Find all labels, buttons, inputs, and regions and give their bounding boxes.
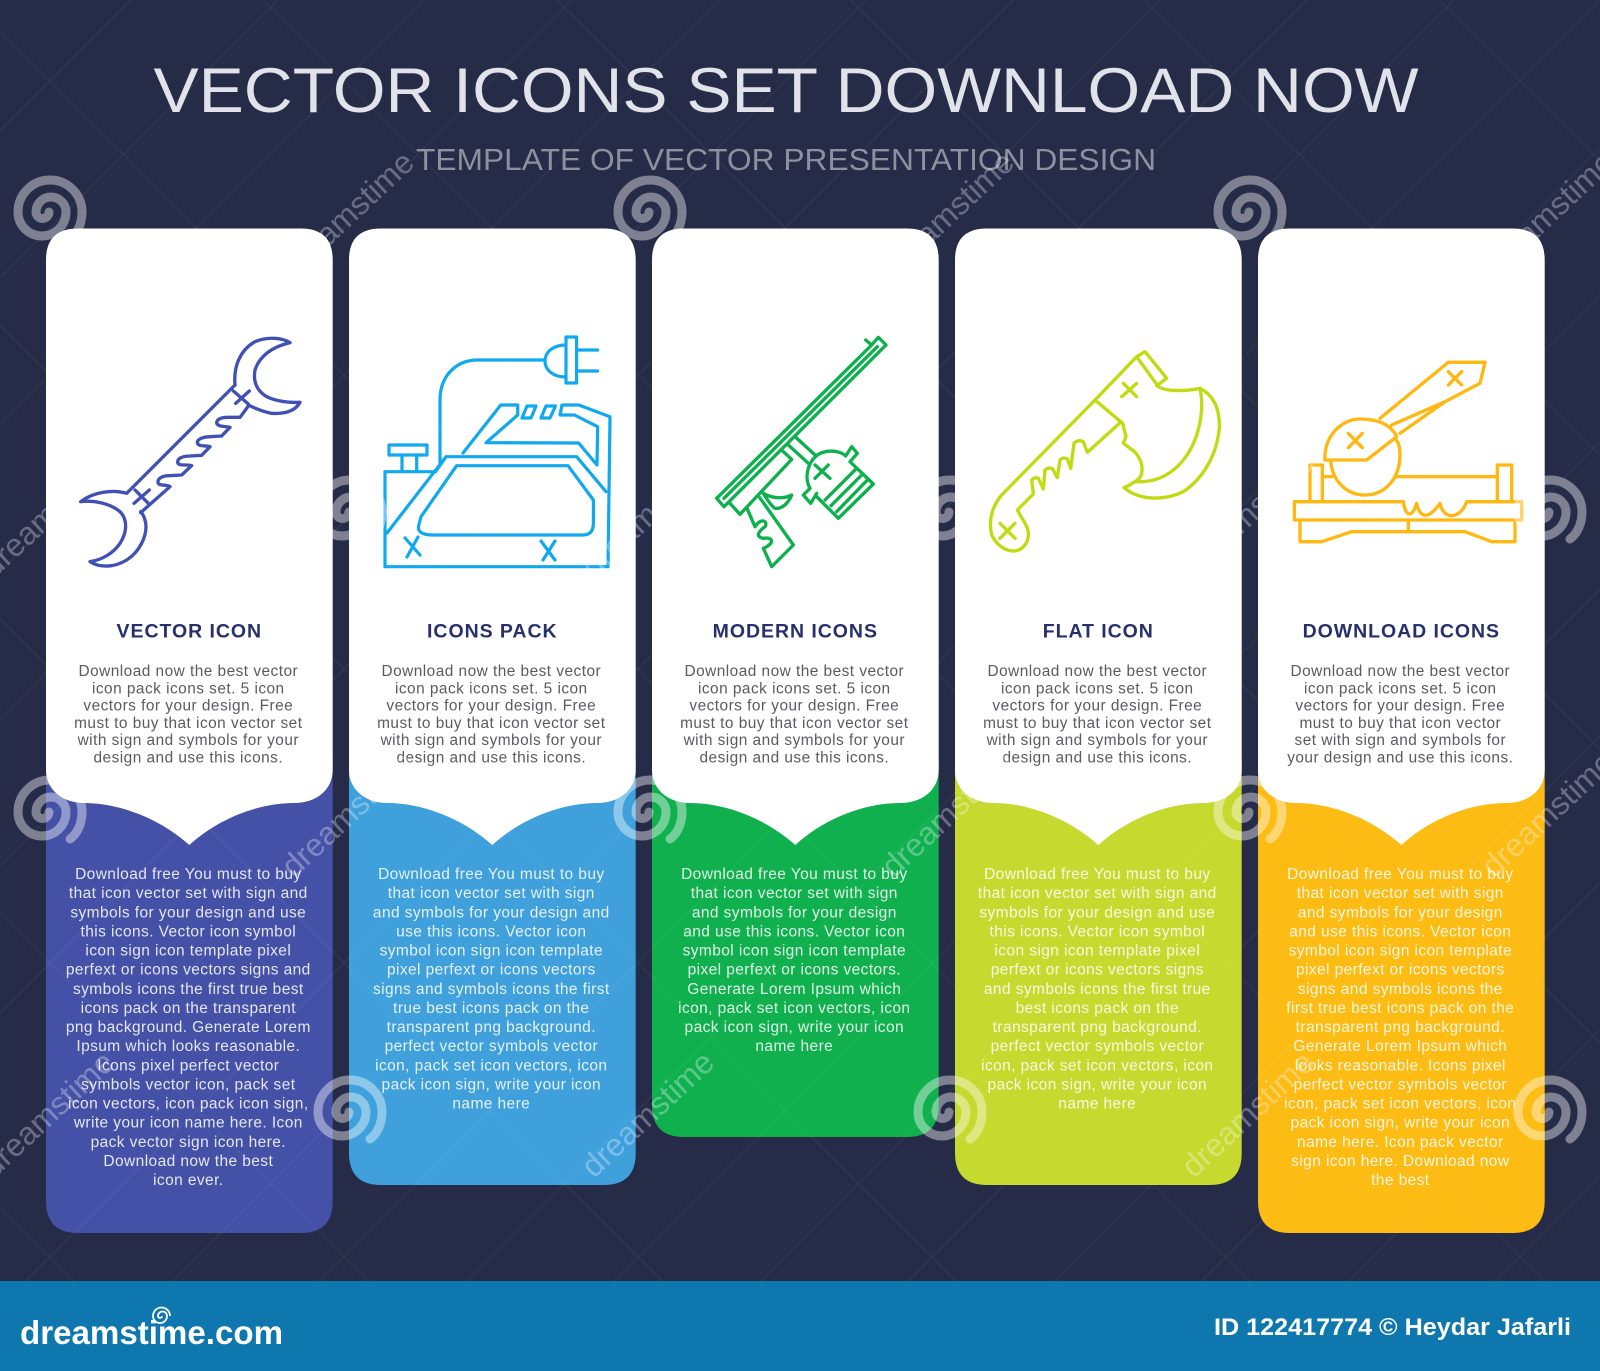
description: design and use this icons. <box>397 750 586 766</box>
lower text: Download free You must to buy <box>984 866 1211 883</box>
lower text: icon, pack set icon vectors, icon <box>375 1057 607 1074</box>
lower text: Icons pixel perfect vector <box>97 1057 279 1074</box>
icon: wrench <box>81 338 300 566</box>
lower text: name here. Icon pack vector <box>1297 1134 1504 1151</box>
lower text: icon, pack set icon vectors, icon <box>981 1057 1213 1074</box>
lower text: and use this icons. Vector icon <box>1289 923 1511 940</box>
heading: ICONS PACK <box>427 620 558 642</box>
colored lower block <box>46 760 333 1233</box>
lower text: icon sign icon template pixel <box>85 943 291 960</box>
description: vectors for your design. Free <box>992 698 1202 715</box>
watermark overlay: dreamstime <box>1174 1044 1321 1184</box>
footer logo: dreamstime.com <box>20 1314 283 1351</box>
lower text: icon sign icon template pixel <box>994 943 1200 960</box>
lower text: Download free You must to buy <box>681 866 908 883</box>
lower text: this icons. Vector icon symbol <box>989 923 1205 940</box>
lower text: Download free You must to buy <box>378 866 605 883</box>
lower text: symbol icon sign icon template <box>683 943 906 960</box>
description: Download now the best vector <box>987 663 1207 680</box>
lower text: transparent png background. <box>993 1019 1202 1036</box>
lower text: perfect vector symbols vector <box>1294 1076 1507 1093</box>
lower text: perfext or icons vectors signs and <box>66 962 311 979</box>
white upper block <box>349 228 636 845</box>
description: icon pack icons set. 5 icon <box>1001 680 1194 697</box>
description: with sign and symbols for your <box>77 732 299 749</box>
lower text: symbols for your design and use <box>70 904 306 921</box>
colored lower block <box>955 760 1242 1185</box>
lower text: perfect vector symbols vector <box>385 1038 598 1055</box>
description: your design and use this icons. <box>1287 750 1513 766</box>
heading: VECTOR ICON <box>117 620 262 642</box>
icon: paintball gun <box>717 337 886 567</box>
lower text: pack icon sign, write your icon <box>382 1076 601 1093</box>
description: design and use this icons. <box>700 750 889 766</box>
lower text: transparent png background. <box>387 1019 596 1036</box>
lower text: and use this icons. Vector icon <box>683 923 905 940</box>
footer bar <box>0 1281 1600 1371</box>
description: with sign and symbols for your <box>683 732 905 749</box>
lower text: symbols for your design and use <box>979 904 1215 921</box>
lower text: Download now the best <box>103 1153 273 1170</box>
white upper block <box>46 228 333 845</box>
colored lower block <box>349 760 636 1185</box>
icon: mitre saw <box>1294 362 1522 542</box>
description: vectors for your design. Free <box>689 698 899 715</box>
footer background <box>0 1281 1600 1371</box>
lower text: that icon vector set with sign <box>691 885 898 902</box>
lower text: icon, pack set icon vectors, icon <box>1284 1096 1516 1113</box>
lower text: pixel perfext or icons vectors <box>1296 962 1505 979</box>
watermark overlay: dreamstime <box>874 744 1021 884</box>
lower text: that icon vector set with sign and <box>978 885 1217 902</box>
lower text: Generate Lorem Ipsum which <box>687 981 901 998</box>
description: must to buy that icon vector set <box>680 715 909 732</box>
lower text: and symbols for your design and <box>373 904 610 921</box>
watermark overlay: dreamstime <box>874 144 1021 284</box>
colored lower block <box>652 760 939 1137</box>
lower text: name here <box>755 1038 833 1055</box>
lower text: symbols vector icon, pack set <box>81 1076 296 1093</box>
lower text: icon, pack set icon vectors, icon <box>678 1000 910 1017</box>
lower text: signs and symbols icons the <box>1298 981 1503 998</box>
lower text: Generate Lorem Ipsum which <box>1293 1038 1507 1055</box>
panel: download icons <box>1258 228 1545 1233</box>
description: must to buy that icon vector set <box>74 715 303 732</box>
description: Download now the best vector <box>78 663 298 680</box>
white upper block <box>955 228 1242 845</box>
description: design and use this icons. <box>1003 750 1192 766</box>
lower text: symbol icon sign icon template <box>1289 943 1512 960</box>
icon: electric planer <box>385 337 610 567</box>
watermark overlay: dreamstime <box>574 444 721 584</box>
description: icon pack icons set. 5 icon <box>1304 680 1497 697</box>
lower text: true best icons pack on the <box>393 1000 589 1017</box>
description: icon pack icons set. 5 icon <box>395 680 588 697</box>
lower text: pixel perfext or icons vectors. <box>688 962 901 979</box>
lower text: symbols icons the first true best <box>73 981 304 998</box>
description: Download now the best vector <box>381 663 601 680</box>
description: must to buy that icon vector <box>1299 715 1501 732</box>
heading: FLAT ICON <box>1043 620 1154 642</box>
lower text: that icon vector set with sign <box>1297 885 1504 902</box>
panel: flat icon <box>955 228 1242 1185</box>
lower text: and symbols for your design <box>692 904 897 921</box>
description: vectors for your design. Free <box>386 698 596 715</box>
lower text: perfect vector symbols vector <box>991 1038 1204 1055</box>
lower text: signs and symbols icons the first <box>373 981 610 998</box>
lower text: first true best icons pack on the <box>1286 1000 1514 1017</box>
lower text: symbol icon sign icon template <box>380 943 603 960</box>
white upper block <box>1258 228 1545 845</box>
lower text: write your icon name here. Icon <box>73 1115 303 1132</box>
title: VECTOR ICONS SET DOWNLOAD NOW <box>154 56 1419 126</box>
lower text: name here <box>1058 1096 1136 1113</box>
footer image id and credit: ID 122417774 © Heydar Jafarli <box>1214 1314 1571 1341</box>
description: Download now the best vector <box>684 663 904 680</box>
description: must to buy that icon vector set <box>983 715 1212 732</box>
watermark overlay: dreamstime <box>274 744 421 884</box>
subtitle: TEMPLATE OF VECTOR PRESENTATION DESIGN <box>416 142 1156 177</box>
lower text: pixel perfext or icons vectors <box>387 962 596 979</box>
heading: DOWNLOAD ICONS <box>1303 620 1500 642</box>
description: design and use this icons. <box>94 750 283 766</box>
icon: axe <box>990 352 1219 551</box>
lower text: icons pack on the transparent <box>81 1000 296 1017</box>
lower text: that icon vector set with sign and <box>69 885 308 902</box>
description: icon pack icons set. 5 icon <box>92 680 285 697</box>
lower text: and symbols for your design <box>1298 904 1503 921</box>
description: must to buy that icon vector set <box>377 715 606 732</box>
panel: modern icons <box>652 228 939 1137</box>
lower text: Ipsum which looks reasonable. <box>76 1038 300 1055</box>
lower text: that icon vector set with sign <box>388 885 595 902</box>
description: with sign and symbols for your <box>986 732 1208 749</box>
watermark overlay: dreamstime <box>1174 444 1321 584</box>
lower text: png background. Generate Lorem <box>66 1019 311 1036</box>
lower text: transparent png background. <box>1296 1019 1505 1036</box>
panel: icons pack <box>349 228 636 1185</box>
lower text: icon vectors, icon pack icon sign, <box>68 1096 309 1113</box>
lower text: the best <box>1371 1172 1430 1189</box>
lower text: name here <box>452 1096 530 1113</box>
description: icon pack icons set. 5 icon <box>698 680 891 697</box>
lower text: best icons pack on the <box>1016 1000 1179 1017</box>
panel: vector icon <box>46 228 333 1233</box>
watermark overlay: dreamstime <box>574 1044 721 1184</box>
description: vectors for your design. Free <box>1295 698 1505 715</box>
lower text: use this icons. Vector icon <box>396 923 586 940</box>
white upper block <box>652 228 939 845</box>
lower text: pack icon sign, write your icon <box>1291 1115 1510 1132</box>
lower text: and symbols icons the first true <box>984 981 1211 998</box>
lower text: looks reasonable. Icons pixel <box>1295 1057 1506 1074</box>
description: vectors for your design. Free <box>83 698 293 715</box>
lower text: Download free You must to buy <box>1287 866 1514 883</box>
description: Download now the best vector <box>1290 663 1510 680</box>
heading: MODERN ICONS <box>713 620 878 642</box>
watermark overlay: dreamstime <box>274 144 421 284</box>
lower text: perfext or icons vectors signs <box>991 962 1204 979</box>
colored lower block <box>1258 760 1545 1233</box>
lower text: sign icon here. Download now <box>1291 1153 1510 1170</box>
lower text: pack icon sign, write your icon <box>685 1019 904 1036</box>
description: set with sign and symbols for <box>1295 732 1506 749</box>
lower text: icon ever. <box>153 1172 224 1189</box>
lower text: pack vector sign icon here. <box>91 1134 286 1151</box>
description: with sign and symbols for your <box>380 732 602 749</box>
lower text: pack icon sign, write your icon <box>988 1076 1207 1093</box>
lower text: Download free You must to buy <box>75 866 302 883</box>
lower text: this icons. Vector icon symbol <box>80 923 296 940</box>
